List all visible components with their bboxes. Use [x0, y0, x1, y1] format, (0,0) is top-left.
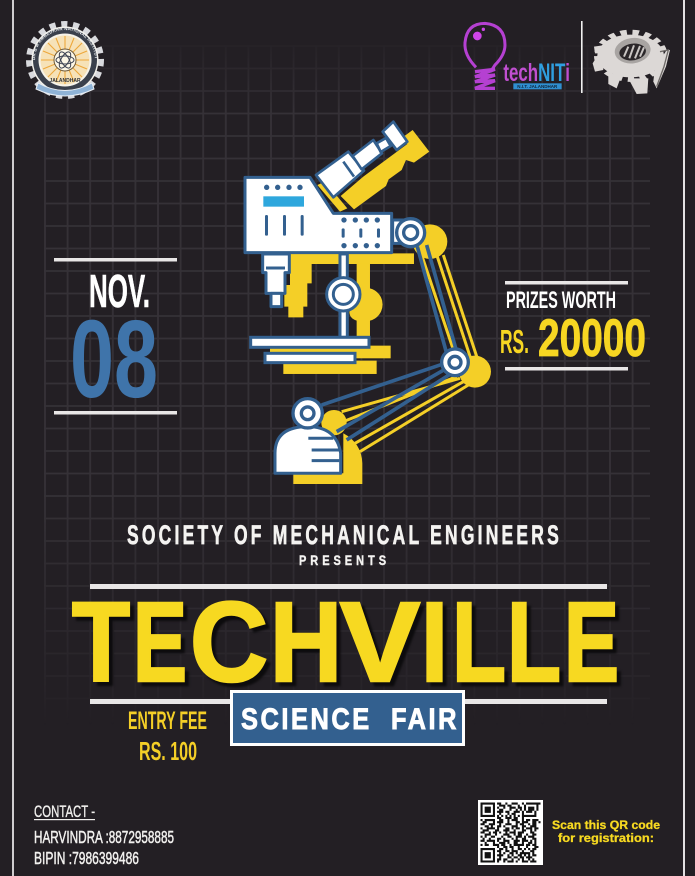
contact details — [34, 802, 174, 868]
date block — [54, 258, 177, 421]
entry fee: ENTRY FEE — [128, 707, 207, 735]
title: H — [270, 579, 342, 705]
contact details: BIPIN :7986399486 — [34, 848, 139, 868]
institute logo — [26, 21, 104, 99]
presents label: PRESENTS — [299, 552, 390, 568]
icon: light bulb — [465, 23, 505, 88]
QR caption: Scan this QR code — [552, 818, 660, 832]
month: NOV. — [89, 265, 150, 317]
QR caption: for registration: — [558, 831, 654, 845]
eyepiece tube — [316, 122, 407, 197]
title: E — [564, 579, 619, 705]
microscope yellow shadow shapes — [270, 130, 491, 484]
subtitle badge — [232, 692, 464, 744]
technology club logo — [465, 23, 570, 89]
prize amount: 20000 — [538, 309, 646, 368]
title: T — [72, 579, 130, 705]
base joint — [293, 399, 322, 428]
prize currency: RS. — [500, 323, 529, 360]
blue arm rods — [322, 245, 457, 440]
title — [72, 579, 619, 705]
elbow joint — [442, 349, 468, 376]
joint connector — [393, 220, 407, 243]
title: V — [340, 579, 420, 705]
yellow arm rods — [342, 245, 477, 452]
wordmark ribbon: N.I.T. JALANDHAR — [517, 84, 558, 89]
institute logo: JALANDHAR — [49, 78, 81, 84]
base dome — [275, 427, 341, 473]
technology club wordmark: techNITi — [503, 59, 570, 87]
icon: mechanical gear logo — [593, 33, 670, 94]
contact details: HARVINDRA :8872958885 — [34, 827, 174, 847]
focus column — [327, 254, 360, 337]
title: E — [133, 579, 187, 705]
microscope head — [245, 177, 392, 253]
title: L — [507, 579, 561, 705]
subtitle badge: SCIENCE FAIR — [241, 703, 459, 736]
QR code — [478, 800, 543, 865]
day: 08 — [70, 298, 158, 421]
entry fee — [128, 707, 207, 766]
microscope stage — [251, 337, 369, 363]
QR caption — [552, 818, 660, 845]
contact details: CONTACT - — [34, 802, 95, 821]
title: C — [190, 579, 268, 705]
title: I — [421, 579, 448, 705]
prize block — [500, 281, 646, 370]
entry fee: RS. 100 — [139, 736, 197, 766]
prize label: PRIZES WORTH — [506, 287, 616, 314]
objective lens — [263, 254, 289, 307]
illustration: microscope — [245, 122, 491, 484]
title: L — [452, 579, 506, 705]
upper joint — [397, 219, 425, 247]
